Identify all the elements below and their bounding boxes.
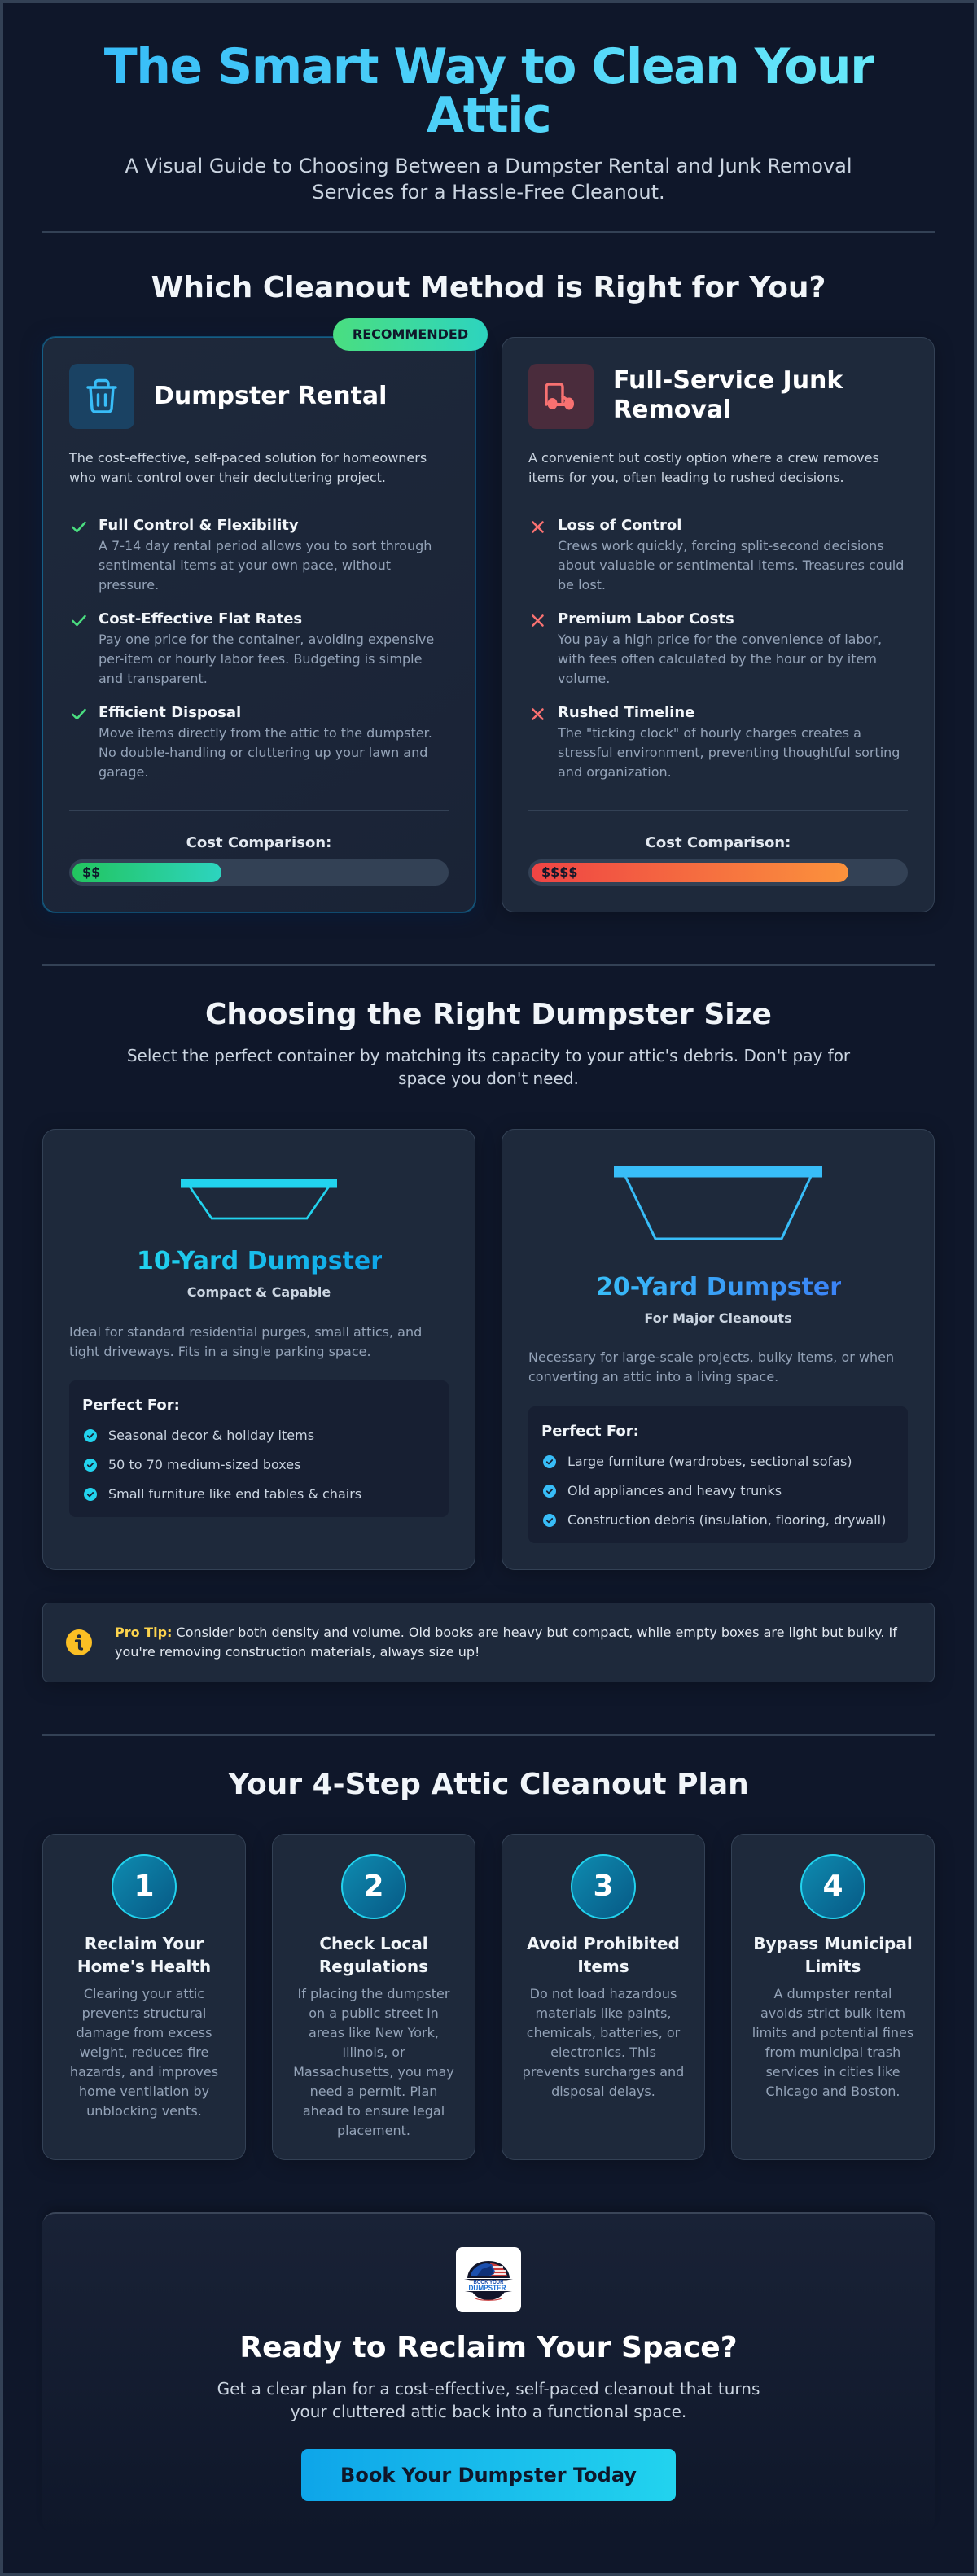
drawback: labor costs [532,610,882,686]
step title: Check Local [319,1934,428,1953]
icon: cross [532,708,544,720]
step text: Chicago and Boston. [766,2084,900,2099]
panel: call to action [42,2212,935,2534]
list item: Old appliances and heavy trunks [567,1483,782,1498]
step text: disposal delays. [551,2084,655,2099]
subtitle [125,155,852,203]
step text: services in cities like [765,2064,900,2080]
list item: Seasonal decor & holiday items [108,1428,314,1443]
subtitle: Services for a Hassle-Free Cleanout. [312,181,665,203]
step title: Limits [805,1957,861,1976]
title [103,42,874,140]
step title: Regulations [319,1957,428,1976]
icon: truck [528,364,594,429]
cta heading: Ready to Reclaim Your Space? [239,2331,738,2364]
icon: cross [532,521,544,533]
panel: 20-yard dumpster [502,1129,935,1570]
step number: 1 [134,1870,155,1903]
icon: check [72,708,86,719]
cost bar fill [532,863,848,882]
card intro [528,450,879,485]
benefit: control: Full Control & Flexibility [99,517,299,534]
size subtitle: Compact & Capable [187,1284,331,1300]
icon: small dumpster [181,1179,337,1219]
subtitle: A Visual Guide to Choosing Between a Dumpster Rental and Junk Removal [125,155,852,177]
step text [752,1986,913,2099]
step text: Clearing your attic [84,1986,204,2001]
benefit: disposal: No double-handling or cluttering up your lawn and [99,745,427,760]
benefit: flat rates [72,610,434,686]
list item: 50 to 70 medium-sized boxes [108,1457,300,1472]
callout: pro tip [42,1603,935,1682]
benefit: flat rates: Pay one price for the container, avoiding expensive [99,632,434,647]
panel: step 4 [731,1834,935,2160]
step text: prevents surcharges and [523,2064,684,2080]
benefit: flat rates: and transparent. [99,671,208,686]
step text: chemicals, batteries, or [527,2025,680,2040]
list: perfect for [528,1406,908,1543]
cta text: Get a clear plan for a cost-effective, self-paced cleanout that turns [217,2379,760,2399]
section intro [127,1046,850,1088]
size description [528,1349,894,1384]
step number [571,1854,636,1919]
card title: Full-Service Junk [613,366,843,395]
step text: ahead to ensure legal [303,2103,445,2119]
drawback: labor costs: You pay a high price for the convenience of labor, [558,632,882,647]
card title: Removal [613,396,731,424]
step text: Massachusetts, you may [293,2064,454,2080]
size description: tight driveways. Fits in a single parking space. [69,1344,371,1359]
step text: home ventilation by [79,2084,209,2099]
list heading: Perfect For: [82,1397,180,1414]
card intro [68,450,427,485]
size description: Necessary for large-scale projects, bulky items, or when [528,1349,894,1365]
card title [613,366,843,424]
panel: step 3 [502,1834,705,2160]
size description: converting an attic into a living space. [528,1369,778,1384]
cta button [301,2449,676,2501]
step text: damage from excess [77,2025,212,2040]
cost bar fill: $$$$ [541,864,578,880]
drawback: control: Crews work quickly, forcing split-second decisions [558,538,884,553]
step title [77,1934,211,1976]
step title: Items [577,1957,629,1976]
card intro: A convenient but costly option where a crew removes [528,450,879,466]
step text: avoids strict bulk item [760,2005,905,2021]
size title: 20-Yard Dumpster [596,1273,842,1301]
icon: cross [532,614,544,627]
step text: weight, reduces fire [80,2045,208,2060]
drawback: timeline: The "ticking clock" of hourly charges creates a [558,725,861,741]
panel: 10-yard dumpster [42,1129,475,1570]
drawback: labor costs: volume. [558,671,610,686]
drawback: labor costs: Premium Labor Costs [558,610,734,628]
benefit: flat rates: Cost-Effective Flat Rates [99,610,302,628]
card title: Dumpster Rental [154,382,387,410]
section intro: space you don't need. [398,1069,579,1088]
step text [70,1986,218,2119]
drawback: control: Loss of Control [558,517,681,534]
list item: Construction debris (insulation, flooring, drywall) [567,1512,886,1528]
drawback: timeline [532,704,900,780]
list heading: Perfect For: [541,1423,639,1440]
step title [319,1934,428,1976]
step text: Do not load hazardous [530,1986,677,2001]
drawback: timeline: stressful environment, preventing thoughtful sorting [558,745,900,760]
drawback: labor costs: with fees often calculated by the hour or by item [558,651,877,667]
icon: check [72,615,86,627]
title: The Smart Way to Clean Your [104,38,873,95]
tip text [115,1625,897,1660]
heading: 4-step plan: Your 4-Step Attic Cleanout Plan [228,1768,749,1801]
benefit: control [72,517,432,593]
step number: 4 [822,1870,843,1903]
step number [341,1854,406,1919]
cost label: Cost Comparison: [646,834,791,851]
step text: electronics. This [550,2045,656,2060]
badge: recommended [333,318,488,351]
step text: unblocking vents. [86,2103,202,2119]
drawback: control [532,517,904,593]
step title: Home's Health [77,1957,211,1976]
step number: 2 [363,1870,384,1903]
heading: which cleanout method: Which Cleanout Method is Right for You? [151,271,826,304]
cost label: Cost Comparison: [186,834,331,851]
benefit: control: pressure. [99,577,159,593]
icon: trash bin [69,364,134,429]
step text: on a public street in [309,2005,439,2021]
drawback: timeline: Rushed Timeline [558,704,694,721]
benefit: control: sentimental items at your own pace, without [99,558,391,573]
cta button: Book Your Dumpster Today [340,2464,637,2486]
cost bar [69,859,449,886]
list item: Small furniture like end tables & chairs [108,1486,361,1502]
panel: step 2 [272,1834,475,2160]
step text [293,1986,454,2138]
list: perfect for [69,1380,449,1517]
benefit: flat rates: per-item or hourly labor fees. Budgeting is simple [99,651,422,667]
step title: Avoid Prohibited [527,1934,680,1953]
heading: dumpster size: Choosing the Right Dumpster Size [205,998,772,1031]
logo: BOOK YOUR [474,2280,503,2285]
card intro: The cost-effective, self-paced solution for homeowners [69,450,427,466]
step text: A dumpster rental [774,1986,892,2001]
step title: Bypass Municipal [753,1934,913,1953]
cost bar [528,859,908,886]
tip text: Pro Tip: Consider both density and volume. Old books are heavy but compact, while empty boxes are light but bulky. If [115,1625,897,1640]
panel: dumpster rental [42,337,475,912]
step text: hazards, and improves [70,2064,218,2080]
step text: areas like New York, [309,2025,439,2040]
title: Attic [427,87,550,144]
size description [69,1324,422,1359]
step text: If placing the dumpster [298,1986,449,2001]
step title [753,1934,913,1976]
panel: step 1 [42,1834,246,2160]
step number [800,1854,865,1919]
step number [112,1854,177,1919]
step title [527,1934,680,1976]
list item: Large furniture (wardrobes, sectional sofas) [567,1454,852,1469]
icon: info [66,1629,92,1655]
size description: Ideal for standard residential purges, small attics, and [69,1324,422,1340]
step text: placement. [337,2123,410,2138]
drawback: control: about valuable or sentimental items. Treasures could [558,558,904,573]
cta text: your cluttered attic back into a functional space. [291,2402,686,2421]
card intro: items for you, often leading to rushed decisions. [528,470,844,485]
benefit: disposal: Move items directly from the attic to the dumpster. [99,725,432,741]
step text: from municipal trash [765,2045,900,2060]
cost bar fill [72,863,221,882]
step text [523,1986,684,2099]
step text: Illinois, or [342,2045,405,2060]
drawback: timeline: and organization. [558,764,672,780]
benefit: disposal [72,704,432,780]
benefit: control: A 7-14 day rental period allows you to sort through [99,538,432,553]
icon: large dumpster [614,1166,822,1240]
benefit: disposal: Efficient Disposal [99,704,241,721]
panel: full-service junk removal [502,337,935,912]
size subtitle: For Major Cleanouts [644,1310,792,1326]
logo: DUMPSTER [469,2284,506,2293]
logo [456,2247,521,2312]
cta text [217,2379,760,2421]
step text: prevents structural [82,2005,206,2021]
step text: need a permit. Plan [310,2084,437,2099]
step text: limits and potential fines [752,2025,913,2040]
tip text: you're removing construction materials, always size up! [115,1644,480,1660]
card intro: who want control over their decluttering project. [69,470,386,485]
step number: 3 [593,1870,614,1903]
size title: 10-Yard Dumpster [137,1247,383,1275]
cost bar fill: $$ [82,864,100,880]
step title: Reclaim Your [85,1934,204,1953]
step text: materials like paints, [536,2005,671,2021]
section intro: Select the perfect container by matching its capacity to your attic's debris. Don't pay for [127,1046,850,1065]
drawback: control: be lost. [558,577,606,593]
icon: check [72,521,86,532]
badge: recommended: RECOMMENDED [353,326,468,342]
benefit: disposal: garage. [99,764,148,780]
